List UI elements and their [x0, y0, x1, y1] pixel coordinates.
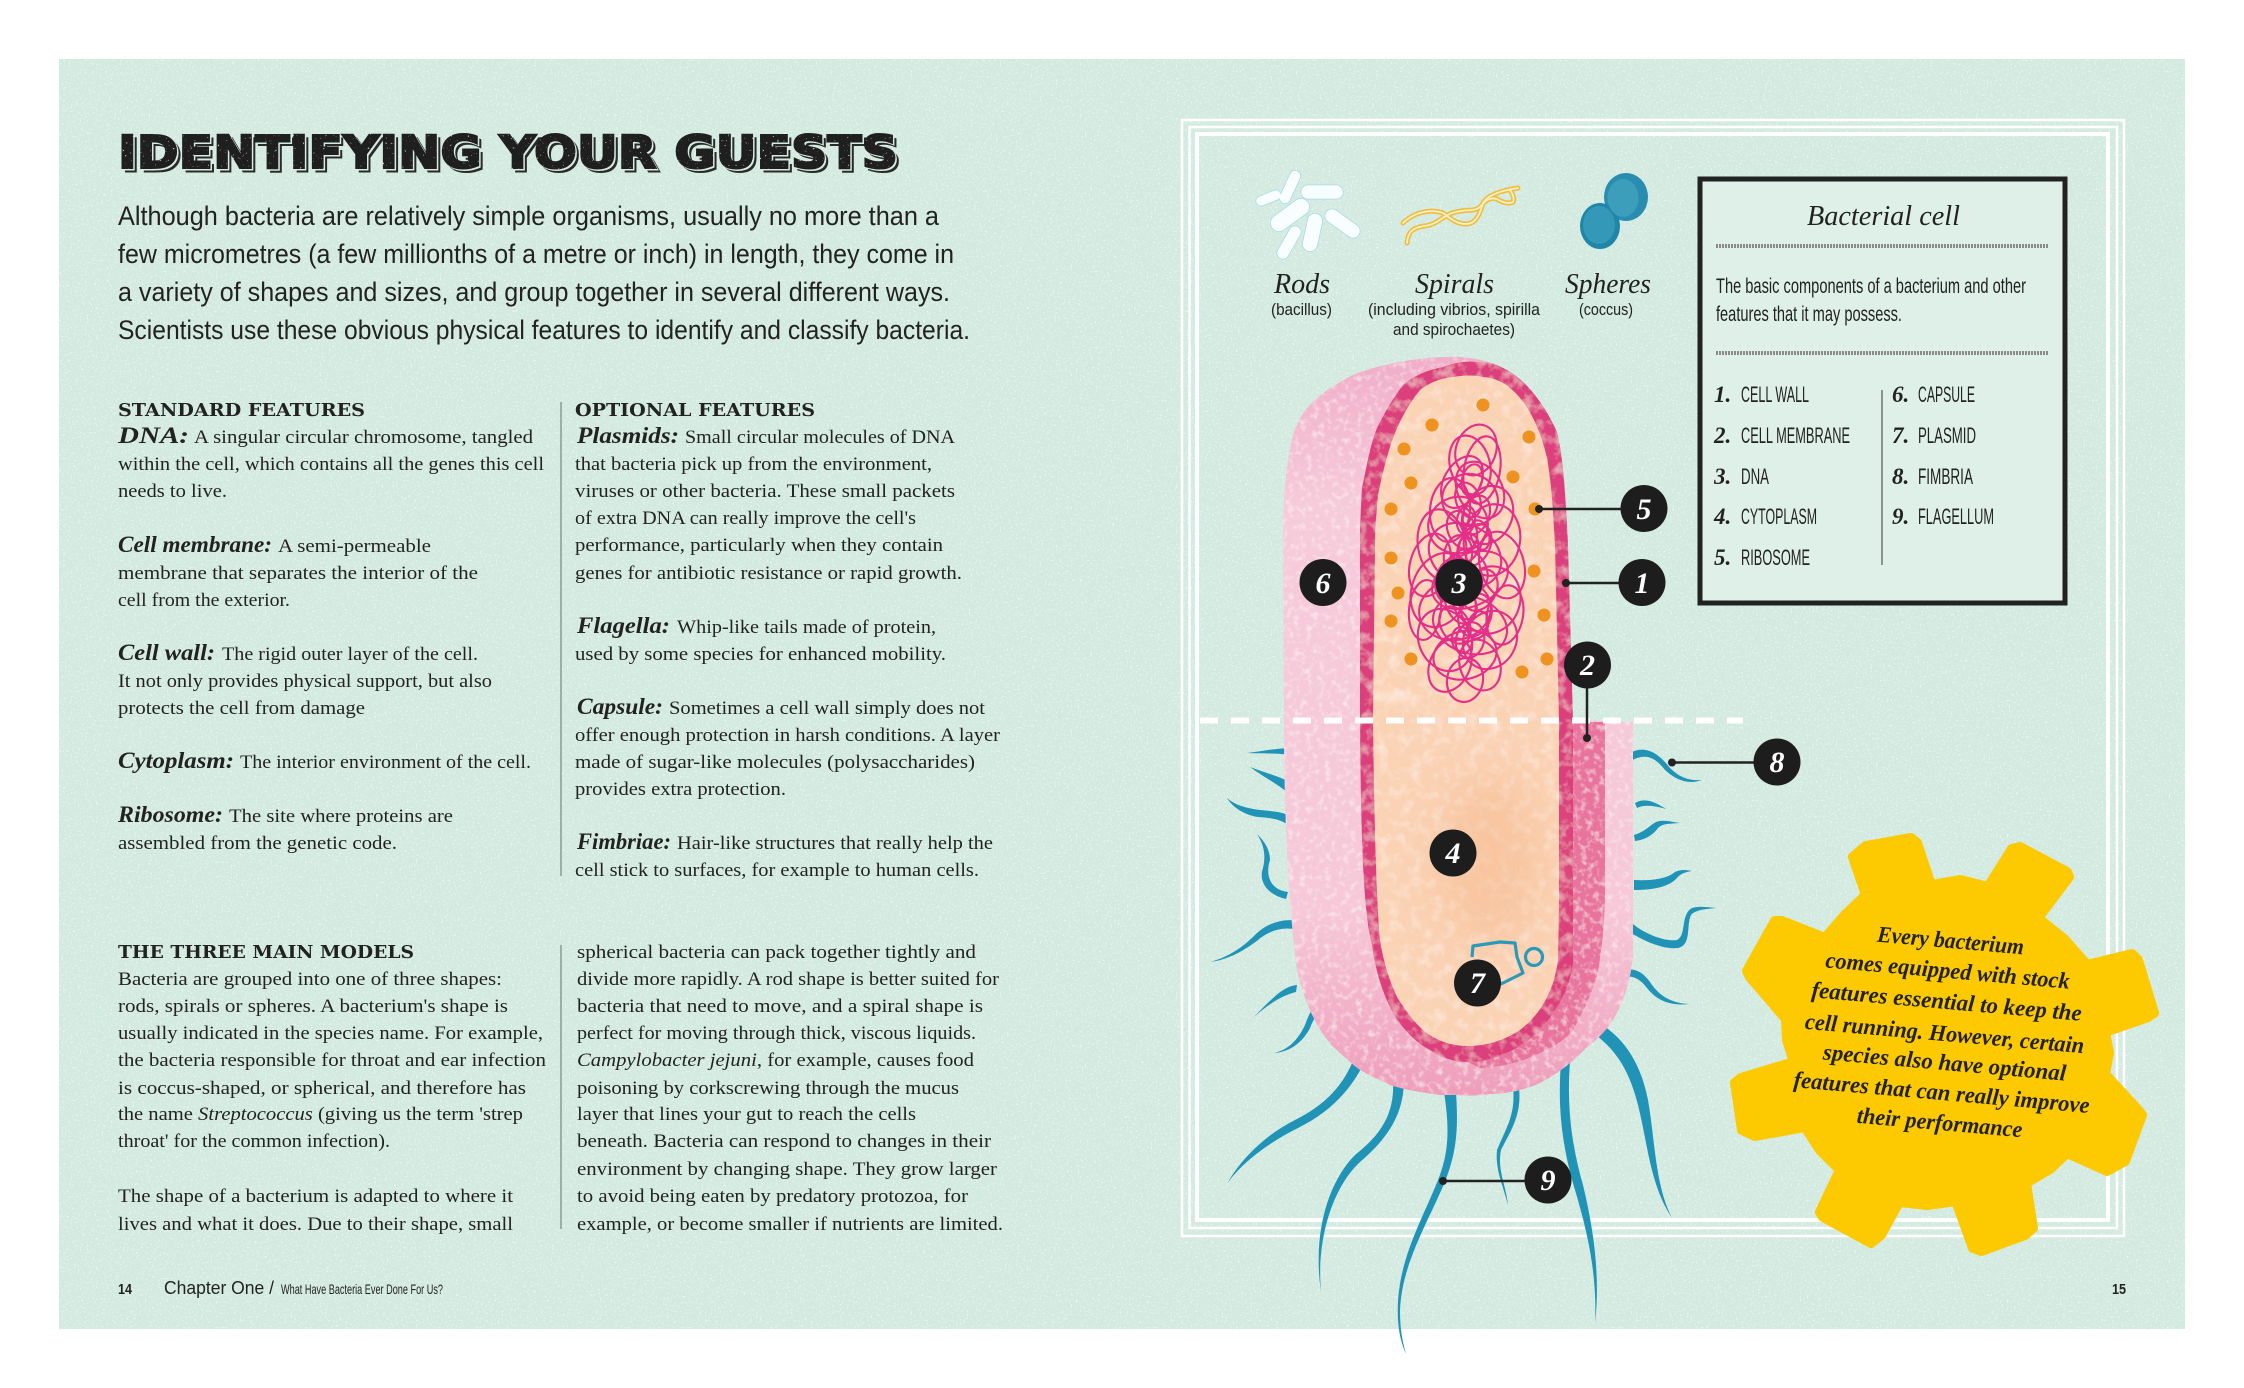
footer: left page number and chapter: [118, 1278, 443, 1298]
legend list: items six to nine: 9.: [1892, 504, 1909, 529]
label: spheres: (coccus): [1579, 300, 1633, 319]
text block: plasmids: [575, 423, 962, 584]
text block: models paragraph one: usually indicated in the species name. For example,: [118, 1023, 543, 1044]
badge 9: [1524, 1156, 1572, 1204]
text block: cell membrane: Cell membrane:: [118, 532, 272, 557]
text block: models paragraph one: Bacteria are grouped into one of three shapes:: [118, 969, 502, 990]
text block: DNA: DNA:: [117, 423, 189, 448]
badge 6: 6: [1316, 567, 1330, 600]
text block: capsule: made of sugar-like molecules (polysaccharides): [575, 752, 975, 773]
legend list: items one to five: 5.: [1714, 545, 1731, 570]
panel: the three main models, column one: [118, 942, 547, 1235]
text block: the three main models, column two: example, or become smaller if nutrients are limited.: [577, 1214, 1003, 1235]
panel: standard features: [117, 400, 544, 854]
text block: models paragraph one: rods, spirals or spheres. A bacterium's shape is: [118, 996, 508, 1017]
text block: cell wall: The rigid outer layer of the cell.: [222, 644, 478, 665]
text block: the three main models, column two: environment by changing shape. They grow larger: [577, 1159, 998, 1180]
intro paragraph: [118, 201, 970, 345]
text block: cytoplasm: Cytoplasm:: [118, 748, 234, 773]
text block: the three main models, column two: layer that lines your gut to reach the cells: [577, 1104, 916, 1125]
legend list: items six to nine: CAPSULE: [1918, 382, 1975, 407]
title: IDENTIFYING YOUR GUESTS: [118, 126, 898, 179]
gear text: comes equipped with stock: [1825, 947, 2071, 994]
text block: the three main models, column two: beneath. Bacteria can respond to changes in their: [577, 1131, 992, 1152]
badge 3: [1436, 559, 1482, 606]
text block: ribosome: [117, 802, 453, 854]
shape labels: [1271, 268, 1651, 339]
legend list: items one to five: 4.: [1713, 504, 1731, 529]
chart: bacterium illustration: [1200, 357, 1743, 1354]
intro paragraph: few micrometres (a few millionths of a metre or inch) in length, they come in: [118, 239, 954, 269]
text block: models paragraph two: The shape of a bacterium is adapted to where it: [118, 1186, 514, 1207]
capsule, cell body outline: [1283, 357, 1633, 1096]
ribosome dots: [1384, 398, 1554, 678]
gear text: their performance: [1856, 1103, 2023, 1142]
text block: plasmids: of extra DNA can really improve the cell's: [575, 508, 916, 529]
panel: optional features: [575, 400, 1001, 881]
label: spheres: Spheres: [1565, 268, 1651, 300]
label: rods: (bacillus): [1271, 300, 1332, 319]
legend list: items one to five: DNA: [1741, 464, 1769, 489]
legend list: items six to nine: 6.: [1892, 382, 1909, 407]
text block: cytoplasm: [118, 748, 531, 773]
badge 4: 4: [1444, 837, 1460, 870]
text block: cell wall: Cell wall:: [118, 640, 215, 665]
badge 8: [1754, 738, 1800, 786]
text block: flagella: Flagella:: [576, 613, 670, 638]
legend list: items one to five: RIBOSOME: [1741, 545, 1810, 570]
label: spirals: [1368, 268, 1540, 339]
legend list: items six to nine: PLASMID: [1918, 423, 1976, 448]
text block: models paragraph one: [118, 969, 547, 1152]
heading: standard features: STANDARD FEATURES: [118, 400, 365, 421]
column divider: features: [560, 402, 562, 876]
text block: plasmids: Small circular molecules of DNA: [685, 427, 955, 448]
text block: fimbriae: cell stick to surfaces, for example to human cells.: [575, 860, 979, 881]
text block: the three main models, column two: [577, 942, 1003, 1235]
gear text: Every bacterium: [1875, 922, 2025, 959]
legend list: items one to five: 3.: [1713, 464, 1731, 489]
badge 3: 3: [1450, 567, 1466, 600]
text block: cell membrane: A semi-permeable: [278, 536, 431, 557]
flagella: [1227, 1020, 1672, 1354]
text block: ribosome: The site where proteins are: [229, 806, 453, 827]
legend heading: Bacterial cell: [1807, 200, 1960, 232]
icon: spirals: [1403, 188, 1518, 243]
intro paragraph: a variety of shapes and sizes, and group together in several different ways.: [118, 277, 950, 307]
text block: DNA: A singular circular chromosome, tangled: [194, 427, 534, 448]
heading: optional features: OPTIONAL FEATURES: [575, 400, 815, 421]
badge 8: 8: [1770, 746, 1784, 779]
cell wall ring: [1360, 362, 1573, 1062]
text block: capsule: Capsule:: [577, 694, 663, 719]
legend description: [1716, 275, 2026, 326]
text block: plasmids: performance, particularly when they contain: [575, 535, 944, 556]
badge 1: [1618, 559, 1666, 606]
text block: cell wall: It not only provides physical support, but also: [118, 671, 492, 692]
text block: cell membrane: membrane that separates the interior of the: [118, 563, 478, 584]
text block: the three main models, column two: to avoid being eaten by predatory protozoa, for: [577, 1186, 969, 1207]
text block: the three main models, column two: divide more rapidly. A rod shape is better suited for: [577, 969, 1000, 990]
legend list: items one to five: CELL WALL: [1741, 382, 1809, 407]
text block: plasmids: viruses or other bacteria. These small packets: [575, 481, 955, 502]
medium pink band of the cut-away half: [1468, 722, 1605, 1068]
text block: models paragraph one: the bacteria responsible for throat and ear infection: [118, 1050, 547, 1071]
intro paragraph: Although bacteria are relatively simple organisms, usually no more than a: [118, 201, 940, 231]
legend list: items one to five: CYTOPLASM: [1741, 504, 1817, 529]
label: rods: [1271, 268, 1332, 319]
text block: cell wall: [118, 640, 492, 719]
text block: DNA: [117, 423, 544, 502]
DNA scribble: [1401, 419, 1532, 705]
legend list: items one to five: [1713, 382, 1850, 570]
text block: DNA: within the cell, which contains all the genes this cell: [118, 454, 544, 475]
text block: capsule: offer enough protection in harsh conditions. A layer: [575, 725, 1001, 746]
text block: flagella: used by some species for enhanced mobility.: [575, 644, 946, 665]
text block: capsule: provides extra protection.: [575, 779, 786, 800]
label: spheres: [1565, 268, 1651, 319]
gear text: cell running. However, certain: [1804, 1009, 2085, 1058]
badge 5: [1620, 485, 1668, 532]
legend list: items six to nine: 8.: [1892, 464, 1909, 489]
text block: cell membrane: cell from the exterior.: [118, 590, 290, 611]
badge 9: 9: [1540, 1164, 1556, 1197]
gear text: [1793, 922, 2091, 1142]
footer: left page number and chapter: 14: [118, 1281, 133, 1298]
gear shape: [1735, 838, 2154, 1251]
legend list: items six to nine: FLAGELLUM: [1918, 504, 1994, 529]
label: spirals: and spirochaetes): [1393, 320, 1515, 339]
legend list: items six to nine: [1892, 382, 1994, 529]
heading: the three main models: THE THREE MAIN MODELS: [118, 942, 414, 963]
footer: left page number and chapter: Chapter One /: [164, 1278, 274, 1298]
cytoplasm: [1373, 376, 1559, 1046]
legend list: items one to five: 1.: [1714, 382, 1731, 407]
badge 2: 2: [1579, 649, 1595, 682]
text block: models paragraph two: lives and what it does. Due to their shape, small: [118, 1214, 513, 1235]
text block: cell wall: protects the cell from damage: [118, 698, 365, 719]
fimbriae: [1210, 748, 1716, 1053]
plasmid icon: [1472, 942, 1542, 988]
legend list: items six to nine: FIMBRIA: [1918, 464, 1973, 489]
badge 7: 7: [1470, 967, 1486, 1000]
text block: flagella: Whip-like tails made of protein,: [677, 617, 936, 638]
leader lines and dots: [1439, 505, 1765, 1185]
badge 5: 5: [1636, 493, 1652, 526]
text block: ribosome: assembled from the genetic code.: [118, 833, 397, 854]
badge 1: 1: [1634, 567, 1650, 600]
cut-away dashed line: [1200, 718, 1743, 724]
text block: plasmids: Plasmids:: [576, 423, 679, 448]
legend box: [1700, 179, 2065, 603]
gear text: features that can really improve: [1793, 1067, 2091, 1118]
text block: capsule: Sometimes a cell wall simply does not: [669, 698, 986, 719]
text block: the three main models, column two: perfect for moving through thick, viscous liquids.: [577, 1023, 976, 1044]
text block: models paragraph one: is coccus-shaped, or spherical, and therefore has: [118, 1078, 526, 1099]
label: rods: Rods: [1273, 268, 1330, 300]
text block: the three main models, column two: spherical bacteria can pack together tightly and: [577, 942, 977, 963]
legend description: features that it may possess.: [1716, 303, 1902, 326]
legend description: The basic components of a bacterium and other: [1716, 275, 2026, 298]
lower cytoplasm shading: [1440, 775, 1540, 945]
text block: fimbriae: [575, 829, 993, 881]
intro paragraph: Scientists use these obvious physical features to identify and classify bacteria.: [118, 315, 970, 345]
badge 7: [1454, 960, 1501, 1006]
text block: the three main models, column two: poisoning by corkscrewing through the mucus: [577, 1078, 959, 1099]
legend list: items six to nine: 7.: [1892, 423, 1909, 448]
footer: right page number: 15: [2112, 1281, 2126, 1298]
text block: cell membrane: [118, 532, 478, 611]
text block: plasmids: that bacteria pick up from the environment,: [575, 454, 932, 475]
column divider: models: [560, 945, 562, 1229]
text block: fimbriae: Hair-like structures that really help the: [677, 833, 993, 854]
text block: models paragraph one: throat' for the common infection).: [118, 1131, 390, 1152]
text block: flagella: [575, 613, 946, 665]
badge 4: [1430, 830, 1476, 876]
panel: bacterial cell legend: [1700, 179, 2065, 603]
gear text: features essential to keep the: [1811, 977, 2083, 1026]
text block: models paragraph two: [118, 1186, 514, 1235]
text block: models paragraph one: the name Streptococcus (giving us the term 'strep: [118, 1104, 523, 1125]
pale patch in cytoplasm: [1375, 691, 1412, 702]
label: spirals: (including vibrios, spirilla: [1368, 300, 1540, 319]
badge 2: [1564, 642, 1611, 688]
text block: fimbriae: Fimbriae:: [576, 829, 671, 854]
footer: left page number and chapter: What Have Bacteria Ever Done For Us?: [281, 1281, 443, 1297]
icon: spheres: [1580, 173, 1648, 249]
triple white frame: [1182, 120, 2124, 1236]
gear text: species also have optional: [1821, 1039, 2068, 1086]
legend list: items one to five: 2.: [1713, 423, 1731, 448]
text block: capsule: [575, 694, 1001, 800]
text block: DNA: needs to live.: [118, 481, 227, 502]
icon: rods: [1261, 176, 1353, 253]
callout: yellow gear: [1735, 838, 2154, 1251]
text block: the three main models, column two: Campylobacter jejuni , for example, causes food: [577, 1050, 975, 1071]
number badges: [1300, 485, 1800, 1204]
text block: plasmids: genes for antibiotic resistance or rapid growth.: [575, 563, 962, 584]
legend list: items one to five: CELL MEMBRANE: [1741, 423, 1850, 448]
text block: ribosome: Ribosome:: [117, 802, 223, 827]
text block: the three main models, column two: bacteria that need to move, and a spiral shape is: [577, 996, 983, 1017]
text block: cytoplasm: The interior environment of the cell.: [240, 752, 531, 773]
badge 6: [1300, 559, 1346, 606]
label: spirals: Spirals: [1415, 268, 1494, 300]
